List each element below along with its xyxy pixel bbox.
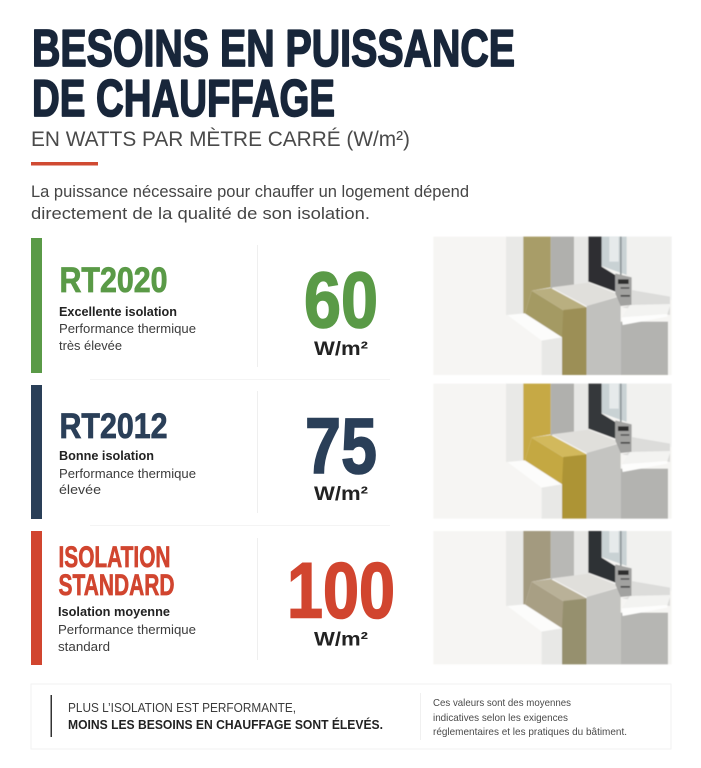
value: 60 W/m²: 60 bbox=[304, 255, 378, 344]
title bbox=[32, 20, 515, 128]
description: isolation standard bbox=[58, 604, 196, 654]
heading: isolation standard: ISOLATION bbox=[58, 541, 170, 574]
description: RT2012: Bonne isolation bbox=[59, 448, 154, 463]
intro text: La puissance nécessaire pour chauffer un logement dépend bbox=[31, 183, 469, 201]
intro text: directement de la qualité de son isolation. bbox=[31, 205, 370, 223]
color bar: green bbox=[31, 238, 42, 373]
heading: RT2020: RT2020 bbox=[60, 261, 168, 300]
callout accent bar bbox=[50, 695, 52, 737]
subtitle: EN WATTS PAR MÈTRE CARRÉ (W/m²) bbox=[31, 128, 410, 151]
heading: isolation standard bbox=[58, 541, 174, 602]
value: 100 W/m²: W/m² bbox=[314, 628, 369, 650]
callout message bbox=[68, 701, 383, 732]
panel: isolation standard bbox=[31, 525, 672, 665]
value: 60 W/m²: W/m² bbox=[314, 338, 369, 360]
footnote: Ces valeurs sont des moyennes bbox=[433, 697, 571, 709]
description: isolation standard: standard bbox=[58, 639, 110, 654]
title: DE CHAUFFAGE bbox=[32, 70, 335, 128]
footnote bbox=[433, 697, 627, 738]
callout message: MOINS LES BESOINS EN CHAUFFAGE SONT ÉLEVÉS. bbox=[68, 717, 383, 732]
title: BESOINS EN PUISSANCE bbox=[32, 20, 515, 78]
heading: RT2012: RT2012 bbox=[60, 407, 168, 446]
image: wall section with glass wool bbox=[433, 384, 672, 519]
color bar: red bbox=[31, 531, 42, 665]
value: 75 W/m²: 75 bbox=[305, 401, 377, 490]
value: 75 W/m²: W/m² bbox=[314, 483, 369, 505]
callout message: PLUS L’ISOLATION EST PERFORMANTE, bbox=[68, 701, 296, 715]
description: RT2012: Performance thermique bbox=[59, 466, 196, 481]
value: 100 W/m²: 100 bbox=[287, 545, 395, 634]
description: isolation standard: Isolation moyenne bbox=[58, 604, 170, 619]
intro text bbox=[31, 183, 469, 223]
image: wall section with standard insulation bbox=[433, 531, 672, 664]
color bar: navy bbox=[31, 385, 42, 519]
description: RT2020 bbox=[59, 304, 196, 353]
description: RT2012: élevée bbox=[59, 482, 101, 497]
description: RT2020: Performance thermique bbox=[59, 321, 196, 336]
description: RT2020: très élevée bbox=[59, 338, 122, 353]
description: RT2020: Excellente isolation bbox=[59, 304, 177, 319]
description: isolation standard: Performance thermique bbox=[58, 622, 196, 637]
image: wall section with rock wool bbox=[433, 237, 672, 375]
heading: isolation standard: STANDARD bbox=[58, 569, 174, 602]
title accent rule bbox=[31, 162, 98, 166]
panel: RT2020 bbox=[31, 237, 672, 375]
description: RT2012 bbox=[59, 448, 196, 497]
panel: footer callout bbox=[31, 684, 671, 749]
panel: RT2012 bbox=[31, 379, 672, 519]
footnote: indicatives selon les exigences bbox=[433, 712, 568, 724]
footnote: réglementaires et les pratiques du bâtiment. bbox=[433, 726, 627, 738]
